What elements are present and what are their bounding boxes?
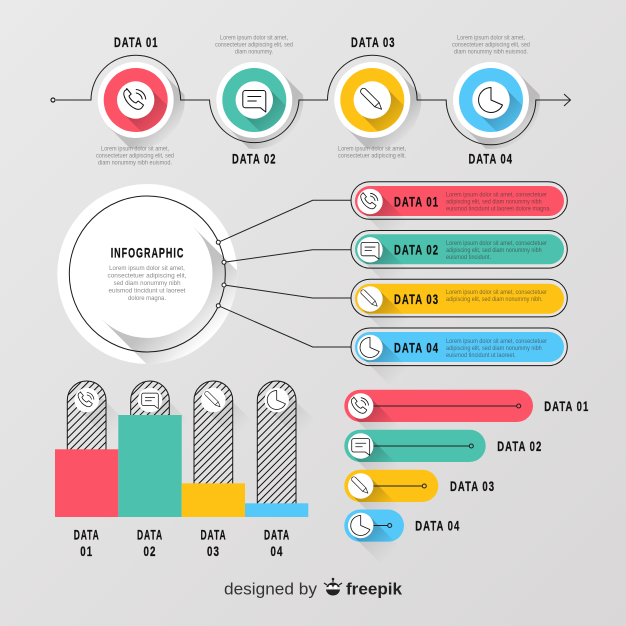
bar label 02: 02 — [144, 543, 156, 559]
horizontal bar: data 01 — [344, 390, 533, 430]
pill data 01 text: euismod tincidunt ut laoreet dolore magna. — [446, 205, 551, 212]
text block: timeline data 01: Lorem ipsum dolor sit amet, — [101, 145, 169, 152]
heading: infographic: INFOGRAPHIC — [111, 244, 184, 260]
capsule 4 — [257, 381, 322, 504]
pill data 04 text: Lorem ipsum dolor sit amet, consectetuer — [446, 338, 547, 345]
pill data 03 label: DATA 03 — [394, 291, 439, 307]
text block: timeline data 02: diam nonummy. — [235, 48, 273, 55]
footer credit — [224, 578, 403, 598]
timeline step 1: phone circle — [98, 62, 185, 149]
panel: pill data 02 — [350, 230, 568, 278]
bar label 03: 03 — [207, 543, 220, 559]
pill data 02 text: Lorem ipsum dolor sit amet, consectetuer — [446, 240, 547, 247]
pill data 04 text — [446, 338, 547, 359]
bar label 02: DATA — [137, 526, 163, 542]
connector lines from circle to pills — [216, 200, 351, 347]
bar label 01: DATA — [74, 526, 100, 542]
bar label 04: 04 — [270, 543, 284, 559]
bar chart — [55, 381, 322, 517]
panel: pill data 01 — [350, 181, 568, 230]
pill data 02 text: euismod tincidunt. — [446, 254, 491, 261]
panel: pill data 03 — [350, 278, 568, 328]
text block: timeline data 02: Lorem ipsum dolor sit amet, — [220, 34, 288, 41]
pill data 02 text — [446, 240, 547, 261]
footer credit: freepik — [346, 580, 403, 598]
text block: timeline data 02: consectetuer adipiscing elit, sed — [215, 41, 293, 48]
panel: pill data 04 — [350, 328, 568, 378]
pill data 02 text: adipiscing elit, sed diam nonummy nibh — [446, 247, 542, 254]
text block: timeline data 04 — [452, 34, 530, 55]
heading: timeline data 04: DATA 04 — [468, 150, 513, 166]
pill data 04 text: adipiscing elit, sed diam nonummy nibh — [446, 345, 542, 352]
panel: central infographic circle — [57, 184, 237, 364]
heading: timeline data 01: DATA 01 — [114, 34, 158, 50]
pill data 04 text: euismod tincidunt ut laoreet. — [446, 352, 516, 359]
icon: freepik bee — [324, 578, 342, 596]
pill data 03 text: Lorem ipsum dolor sit amet, consectetuer — [446, 289, 547, 296]
text block: timeline data 01: consectetuer adipiscing elit, sed — [96, 152, 174, 159]
horizontal bar: data 04 — [344, 510, 404, 555]
pill data 01 text — [446, 191, 551, 212]
horizontal bar: data 02 — [344, 430, 486, 470]
text block: timeline data 01 — [96, 145, 174, 166]
pill data 01 text: Lorem ipsum dolor sit amet, consectetuer — [446, 191, 547, 198]
text block: timeline data 03: consectetuer adipiscing elit. — [338, 152, 406, 159]
text block: timeline data 04: consectetuer adipiscing elit, sed — [452, 41, 530, 48]
horizontal bar: data 03 — [344, 470, 438, 510]
text block: timeline data 04: Lorem ipsum dolor sit amet, — [457, 34, 525, 41]
bar: data 03 — [182, 483, 245, 517]
text block: timeline data 03 — [338, 145, 406, 159]
horizontal bar label 02: DATA 02 — [497, 438, 542, 454]
bar label 03 — [200, 526, 226, 559]
text block: timeline data 04: diam nonummy nibh euismod. — [454, 48, 528, 55]
text block: infographic description: sed diam nonummy nibh — [114, 280, 181, 287]
text block: infographic description: euismod tincidunt ut laoreet — [108, 288, 186, 295]
horizontal bar label 04: DATA 04 — [415, 518, 460, 534]
bar: data 02 — [118, 415, 182, 517]
pill data 03 text — [446, 289, 547, 303]
bar label 01: 01 — [80, 543, 93, 559]
horizontal bar label 01: DATA 01 — [544, 398, 589, 414]
text block: timeline data 01: diam nonummy nibh euismod. — [98, 159, 172, 166]
bar label 04 — [264, 526, 290, 559]
capsule 3 — [194, 381, 258, 484]
horizontal bar label 03: DATA 03 — [450, 478, 495, 494]
pill data 01 text: adipiscing elit, sed diam nonummy nibh — [446, 198, 542, 205]
timeline step 3: pencil circle — [334, 62, 422, 149]
pill data 03 text: adipiscing elit, sed diam nonummy nibh. — [446, 296, 543, 303]
heading: timeline data 02: DATA 02 — [232, 150, 276, 166]
bar label 01 — [74, 526, 100, 559]
bar label 04: DATA — [264, 526, 290, 542]
text block: infographic description: Lorem ipsum dolor sit amet, — [109, 265, 185, 272]
pill data 01 label: DATA 01 — [394, 193, 439, 209]
capsule 2 — [131, 381, 195, 445]
bar label 03: DATA — [200, 526, 226, 542]
text block: timeline data 02 — [215, 34, 293, 55]
capsule 1 — [67, 381, 132, 450]
bar label 02 — [137, 526, 163, 559]
text block: infographic description — [108, 265, 187, 302]
pill data 04 label: DATA 04 — [394, 339, 439, 355]
pill data 02 label: DATA 02 — [394, 242, 439, 258]
timeline step 4: pie circle — [453, 62, 540, 149]
text block: timeline data 03: Lorem ipsum dolor sit amet, — [338, 145, 406, 152]
bar: data 04 — [245, 503, 308, 517]
footer credit: designed by — [224, 580, 318, 598]
bar: data 01 — [55, 449, 118, 517]
text block: infographic description: consectetuer adipiscing elit, — [108, 272, 187, 279]
text block: infographic description: dolore magna. — [128, 295, 166, 302]
timeline step 2: chat circle — [216, 62, 304, 149]
heading: timeline data 03: DATA 03 — [351, 34, 396, 50]
timeline connector line with arcs — [51, 55, 570, 145]
